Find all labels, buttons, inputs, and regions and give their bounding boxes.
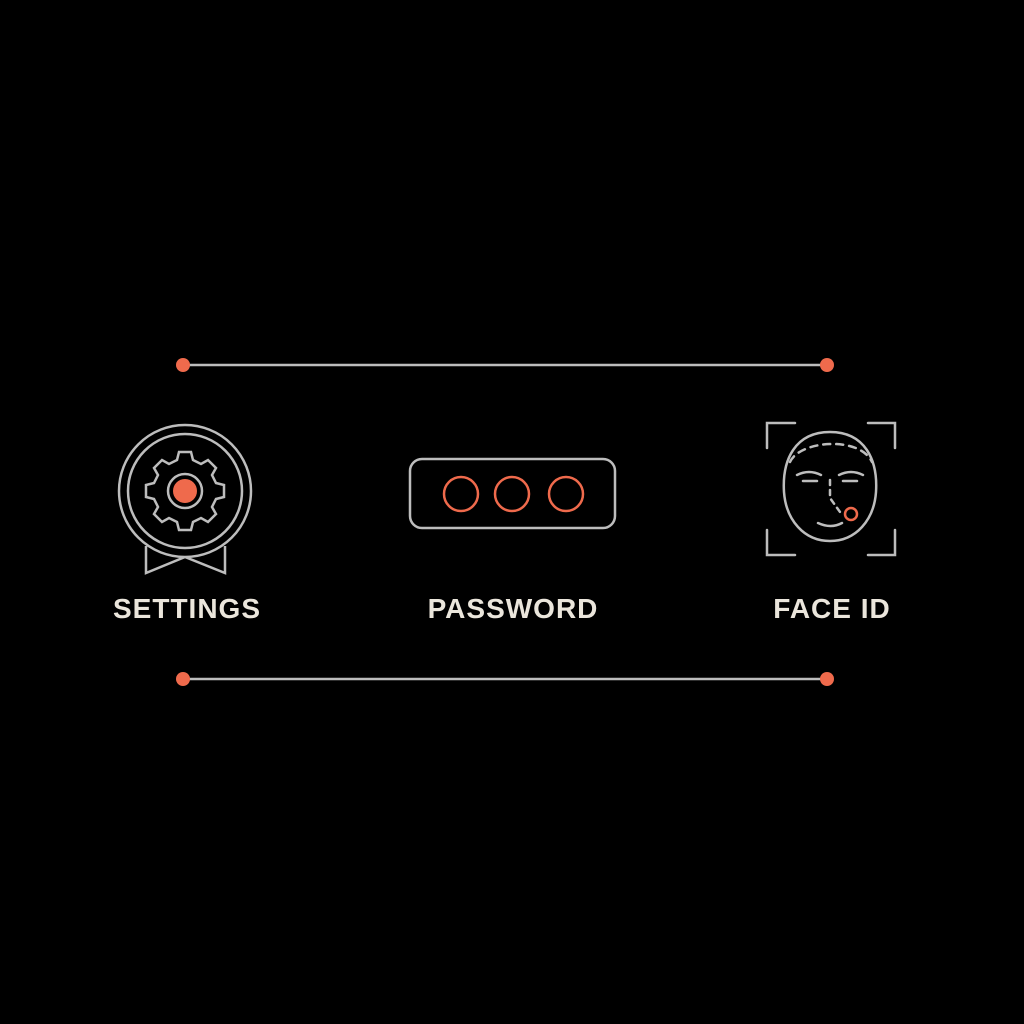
icon: settings badge gear	[119, 425, 251, 573]
label: password: PASSWORD	[428, 593, 598, 624]
icon: password field	[410, 459, 615, 528]
label: settings: SETTINGS	[113, 593, 261, 624]
label: face id: FACE ID	[773, 593, 891, 624]
top connector line	[176, 358, 834, 372]
bottom connector line	[176, 672, 834, 686]
icon: face id	[767, 423, 895, 555]
